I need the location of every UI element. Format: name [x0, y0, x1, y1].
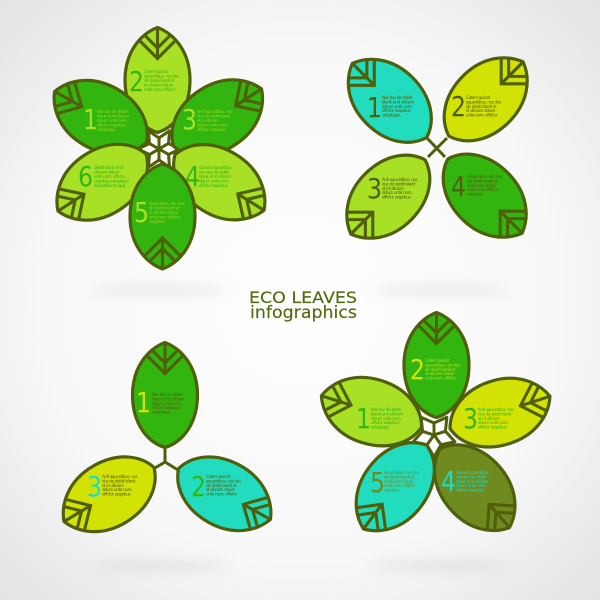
leaf 2: untis nom, officfur [466, 113, 498, 118]
leaf 1: soluptaqui [371, 425, 389, 430]
leaf 1: officfur sequibus [152, 405, 180, 410]
leaf 5: 5 [134, 197, 149, 229]
leaf 4: 4 [451, 171, 466, 203]
leaf 2: id ulliciam dolum [144, 82, 174, 88]
leaf 2: id ulliciam dolum [425, 371, 455, 376]
leaf 2: dis debiti blanit et [144, 78, 175, 83]
leaf 4: dis debiti blanit et [467, 178, 498, 183]
leaf 6: Debiti blanit et id [94, 165, 124, 170]
ground shadows [90, 286, 510, 570]
leaf 3 [156, 62, 279, 173]
leaf 3: et id ulliciam [197, 118, 219, 123]
leaf 3: 3 [87, 471, 102, 503]
leaf 1: 1 [136, 387, 151, 419]
leaf 1 [329, 40, 450, 161]
leaf 1 [132, 342, 198, 448]
leaf 5 [130, 164, 195, 269]
leaf 2: Cotem quisnit [206, 474, 231, 479]
leaf 4: blanit et id ulliciam [456, 479, 488, 484]
leaf 5: dis debiti blanit et [384, 474, 415, 479]
leaf 2: 2 [451, 91, 466, 123]
leaf 2: aquuntibus, nos dus [466, 99, 501, 104]
leaf 1: 1 [367, 92, 382, 124]
stems three leaves [155, 447, 178, 470]
diagram: five leaves [312, 312, 560, 549]
leaf 5: 5 [370, 467, 385, 499]
diagram: four leaves [328, 39, 546, 257]
leaf 5: id ulliciam dolum [149, 210, 179, 215]
leaf 1: officfur sequibus [97, 122, 125, 128]
leaf 3: officfur sequibus [478, 425, 506, 430]
leaf 4: 4 [441, 466, 456, 498]
leaf 1: blanit et id ulliciam [371, 411, 403, 416]
leaf 3: officfur sequibus [197, 127, 225, 132]
leaf 1: officfur sequibus [382, 108, 410, 113]
leaf 2: aquuntibus, nos dus [144, 74, 179, 78]
leaf 2: untis nom, officfur [144, 87, 176, 92]
leaf 4: blanit et id ulliciam [199, 174, 231, 179]
leaf 1: soluptaqui [97, 127, 115, 132]
leaf 5: sequibus [384, 488, 400, 493]
leaf 6: ulliciam dolum [94, 170, 120, 174]
leaf 4: id ulliciam dolum [467, 183, 497, 188]
leaf 1: Nos dus dis debiti [371, 407, 401, 412]
leaf 6: sequibus soluptaqui [94, 178, 129, 184]
leaf 3: dolum untis nom, [382, 190, 412, 195]
leaf 1: Nos dus dis debiti [97, 109, 127, 114]
leaf 5 [337, 426, 453, 548]
leaf 3: dus dis debiti blanit [102, 478, 136, 483]
leaf 1 [312, 365, 431, 458]
leaf 2: dis debiti blanit et [206, 483, 237, 488]
leaf 2: 2 [129, 66, 144, 98]
title: ECO LEAVES [249, 288, 357, 307]
leaf 2 [125, 28, 190, 132]
leaf 2: 2 [191, 471, 206, 503]
leaf 6: doluptationm quis [94, 183, 125, 188]
leaf 3: dolum untis nom, [102, 487, 132, 492]
title [249, 288, 357, 323]
leaf 3: 3 [367, 173, 382, 205]
leaf 4: 4 [185, 161, 200, 193]
leaf 4: Quisnit aquuntibus, [456, 470, 489, 475]
leaf 1: dolum untis nom, [152, 401, 182, 406]
leaf 4: officfur sequibus [456, 488, 484, 493]
leaf 1: 1 [356, 403, 371, 435]
leaf 2: id ulliciam dolum [206, 487, 236, 492]
leaf 3: officfur sequibus [382, 195, 410, 200]
leaf 4: dolum untis nom, [456, 483, 486, 488]
leaf 2: 2 [410, 354, 425, 386]
leaf 2: untis nom, officfur [425, 376, 457, 381]
leaf 2: Cotem quisnit [144, 69, 169, 74]
diagram: three leaves [47, 342, 286, 549]
leaf 1: blanit et id ulliciam [152, 396, 184, 401]
leaf 3: 3 [182, 104, 197, 136]
leaf 3: dolum untis nom, [478, 420, 508, 425]
leaf 6 [40, 127, 164, 238]
leaf 2: dis debiti blanit et [466, 104, 497, 109]
leaf 4: Aquuntibus, nos dus [467, 174, 502, 179]
leaf 3 [328, 137, 448, 257]
leaf 2: aquuntibus, nos dus [206, 478, 241, 483]
leaf 4: sequibus [467, 192, 483, 197]
leaf 2: untis nom, officfur [206, 492, 238, 497]
leaf 6: 6 [78, 161, 93, 193]
leaf 3: Anit aquuntibus, nos [197, 109, 232, 114]
leaf 4: dolum untis nom, [199, 178, 229, 184]
leaf 3: dus dis debiti blanit [478, 411, 512, 416]
leaf 3 [440, 365, 560, 460]
hub five leaves [413, 417, 455, 457]
leaf 3: Anit aquuntibus, nos [102, 474, 137, 479]
leaf 4: Quisnit aquuntibus, [199, 165, 232, 170]
leaf 5: Aquuntibus, nos dus [149, 201, 184, 206]
leaf 5: dis debiti blanit et [149, 206, 180, 210]
leaf 3: dus dis debiti blanit [382, 181, 416, 186]
leaf 1: dolum untis nom, [371, 416, 401, 421]
leaf 1: soluptaqui [152, 410, 170, 415]
diagram: six leaves [39, 28, 281, 269]
leaf 2: id ulliciam dolum [466, 108, 496, 113]
leaf 5: untis nom, officfur [384, 483, 416, 488]
leaf 1: blanit et id ulliciam [382, 99, 414, 104]
leaf 1: dolum untis nom, [97, 118, 127, 123]
leaf 5: id ulliciam dolum [384, 479, 414, 484]
leaf 5: Aquuntibus, nos dus [384, 470, 419, 475]
leaf 4: officfur sequibus [199, 183, 227, 188]
leaf 1: dolum untis nom, [382, 104, 412, 109]
leaf 4 [416, 427, 534, 549]
leaf 2: dis debiti blanit et [425, 367, 456, 372]
leaf 3: 3 [463, 403, 478, 435]
stems four leaves [427, 138, 447, 157]
hub six leaves [138, 131, 180, 167]
leaf 3: et id ulliciam [102, 483, 124, 488]
leaf 3: Anit aquuntibus, nos [382, 177, 417, 182]
leaf 3: et id ulliciam [382, 186, 404, 191]
leaf 1: blanit et id ulliciam [97, 114, 129, 118]
leaf 4: nos dus dis debiti [456, 474, 486, 479]
leaf 6: untis nom, officfur [94, 174, 126, 179]
leaf 2 [404, 312, 469, 418]
leaf 3 [47, 440, 171, 549]
leaf 3: officfur sequibus [102, 492, 130, 497]
leaf 3: et id ulliciam [478, 416, 500, 421]
leaf 2: Cotem quisnit [466, 95, 491, 100]
leaf 4 [158, 127, 281, 238]
leaf 4: untis nom, officfur [467, 187, 499, 192]
leaf 2: Cotem quisnit [425, 358, 450, 363]
leaf 2 [163, 440, 286, 548]
leaf 4 [425, 136, 545, 256]
leaf 3: dus dis debiti blanit [197, 114, 231, 118]
leaf 2: aquuntibus, nos dus [425, 362, 460, 367]
leaf 5: untis nom, officfur [149, 214, 181, 220]
leaf 3: Anit aquuntibus, nos [478, 407, 513, 412]
leaf 2 [426, 39, 546, 159]
leaf 3: dolum untis nom, [197, 122, 227, 128]
leaf 1 [39, 63, 162, 171]
leaf 5: sequibus [149, 219, 165, 224]
leaf 1: 1 [83, 104, 98, 136]
leaf 1: Nos dus dis debiti [382, 95, 412, 100]
leaf 1: Nos dus dis debiti [152, 392, 182, 397]
leaf 4: nos dus dis debiti [199, 170, 229, 174]
title: infographics [250, 303, 357, 323]
leaf 1: soluptaqui [382, 113, 400, 118]
leaf 1: officfur sequibus [371, 420, 399, 425]
